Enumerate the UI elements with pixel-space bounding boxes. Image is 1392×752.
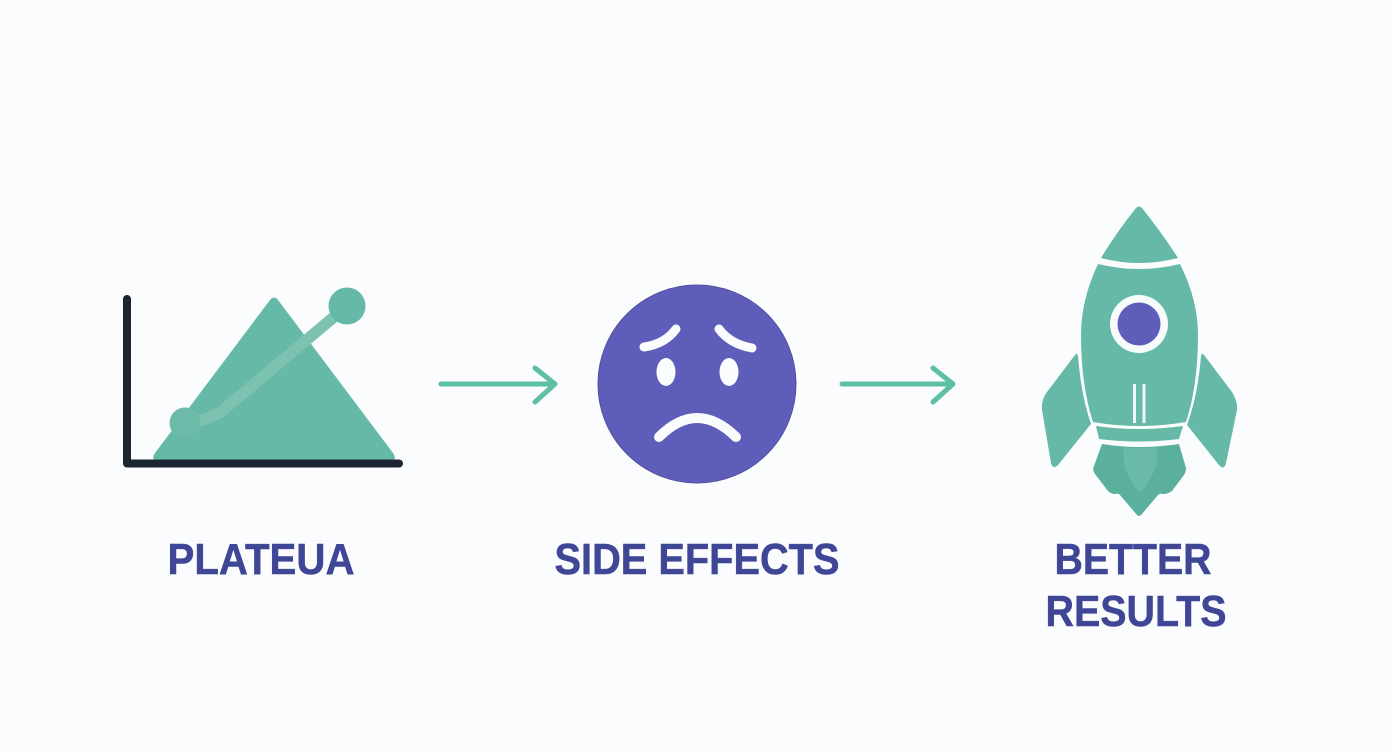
chart triangle — [153, 298, 395, 461]
arrow: plateau to side effects — [441, 368, 555, 402]
rocket window — [1110, 295, 1168, 353]
icon: plateau chart — [127, 288, 399, 464]
inner flame — [1123, 447, 1157, 493]
rocket body — [1081, 264, 1198, 426]
chart axes — [127, 299, 399, 464]
label: better results — [1046, 535, 1226, 636]
right fin — [1187, 354, 1237, 468]
label: better results: BETTER — [1054, 535, 1212, 584]
trend start marker — [170, 408, 200, 438]
rocket centre lines — [1134, 384, 1144, 423]
trend line — [185, 306, 347, 423]
eyes — [656, 358, 738, 386]
frown — [659, 418, 736, 437]
label: better results: RESULTS — [1046, 587, 1226, 636]
trend end marker — [328, 288, 366, 324]
label: plateau: PLATEUA — [168, 535, 354, 584]
rocket flame — [1093, 444, 1186, 516]
icon: rocket — [1042, 206, 1237, 516]
icon: worried face — [598, 285, 796, 483]
face circle — [598, 285, 796, 483]
arrow: side effects to better results — [842, 368, 953, 402]
label: side effects: SIDE EFFECTS — [554, 535, 840, 584]
eyebrows — [644, 329, 752, 348]
rocket nose — [1101, 206, 1178, 263]
left fin — [1042, 354, 1091, 467]
rocket band — [1096, 426, 1183, 442]
